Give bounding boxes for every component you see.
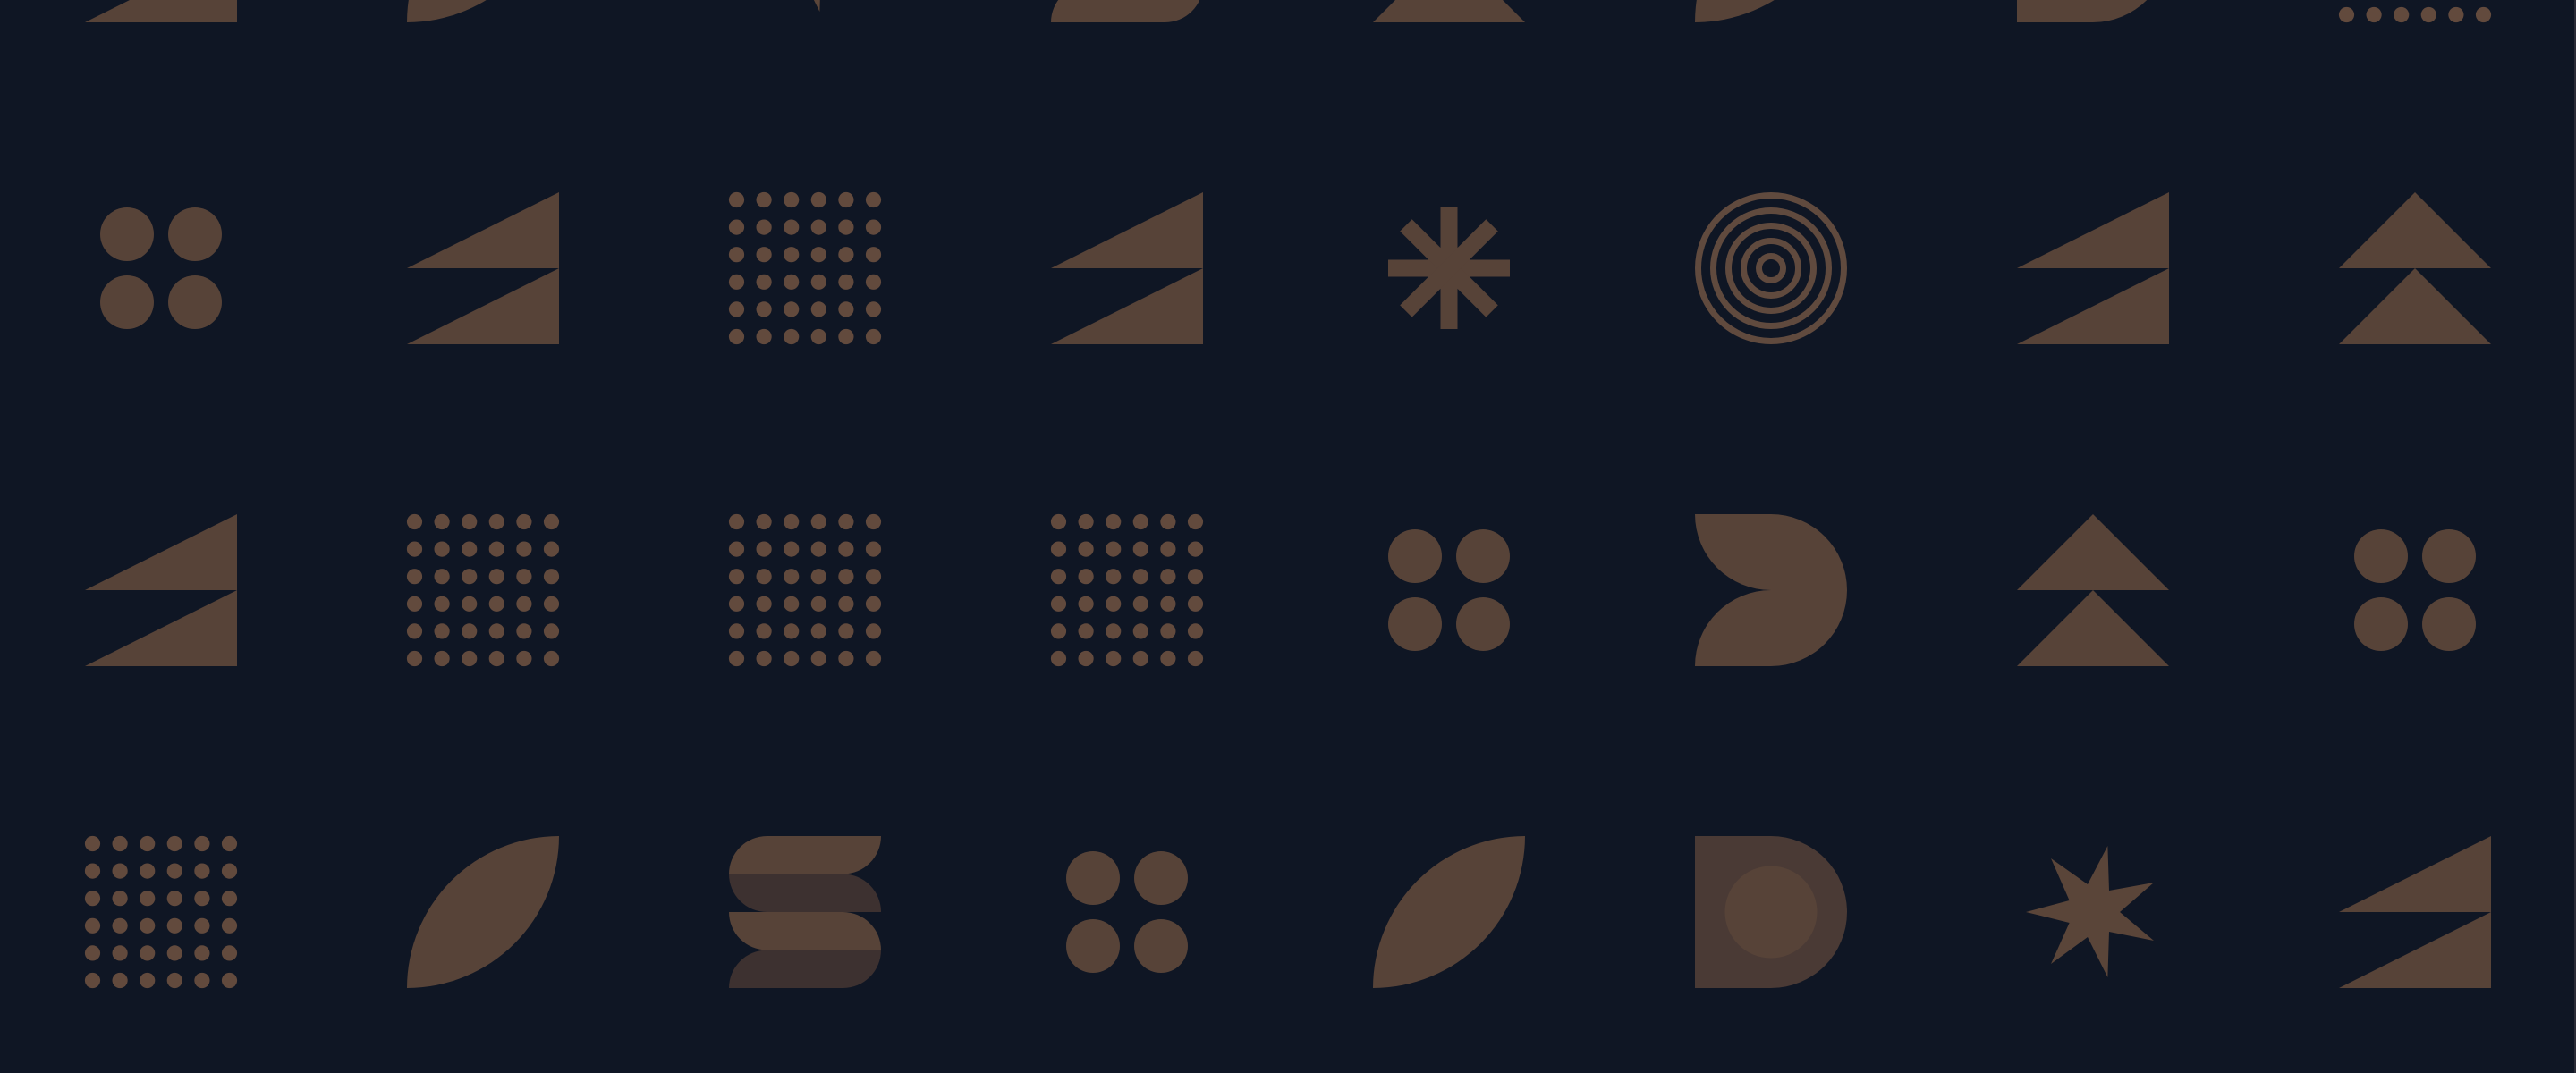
shape: dot grid	[729, 192, 881, 344]
shape: concentric rings	[1698, 195, 1844, 342]
shape: dot grid	[729, 514, 881, 666]
shape: D cropped	[2017, 0, 2169, 22]
shape: leaf cropped	[407, 0, 559, 22]
shape: leaf cropped	[1695, 0, 1847, 22]
shape: dot grid	[407, 514, 559, 666]
shape: double right triangles	[85, 514, 237, 666]
shape: four circles	[100, 207, 222, 329]
shape: dot grid cropped	[2339, 0, 2491, 22]
shape: double right triangles	[1051, 192, 1203, 344]
shape: dot grid	[85, 836, 237, 988]
shape: double triangles	[2017, 514, 2169, 666]
row 3	[85, 836, 2491, 988]
shape: seven-point star	[2026, 846, 2154, 977]
shape: stacked S bands	[729, 836, 881, 988]
shape: double triangles cropped	[1373, 0, 1525, 22]
shape: double right triangles cropped	[85, 0, 237, 22]
shape: double right triangles	[407, 192, 559, 344]
shape: leaf	[1373, 836, 1525, 988]
row 2	[85, 514, 2476, 666]
shape: four circles	[2354, 529, 2476, 651]
shape: dot grid	[1051, 514, 1203, 666]
top row: cropped shapes	[85, 0, 2491, 22]
shape: four circles	[1388, 529, 1510, 651]
shape: double right triangles	[2017, 192, 2169, 344]
shape: double triangles	[2339, 192, 2491, 344]
shape: four circles	[1066, 851, 1188, 973]
shape: S band cropped	[1051, 0, 1203, 22]
shape: D with inner circle	[1695, 836, 1847, 988]
right edge strip	[2574, 0, 2576, 1073]
shape: eight-arm asterisk	[1388, 207, 1510, 329]
shape: star tip cropped	[738, 0, 866, 12]
shape: leaf	[407, 836, 559, 988]
shape: double right triangles	[2339, 836, 2491, 988]
shape: notched D	[1695, 514, 1847, 666]
row 1	[100, 192, 2491, 344]
